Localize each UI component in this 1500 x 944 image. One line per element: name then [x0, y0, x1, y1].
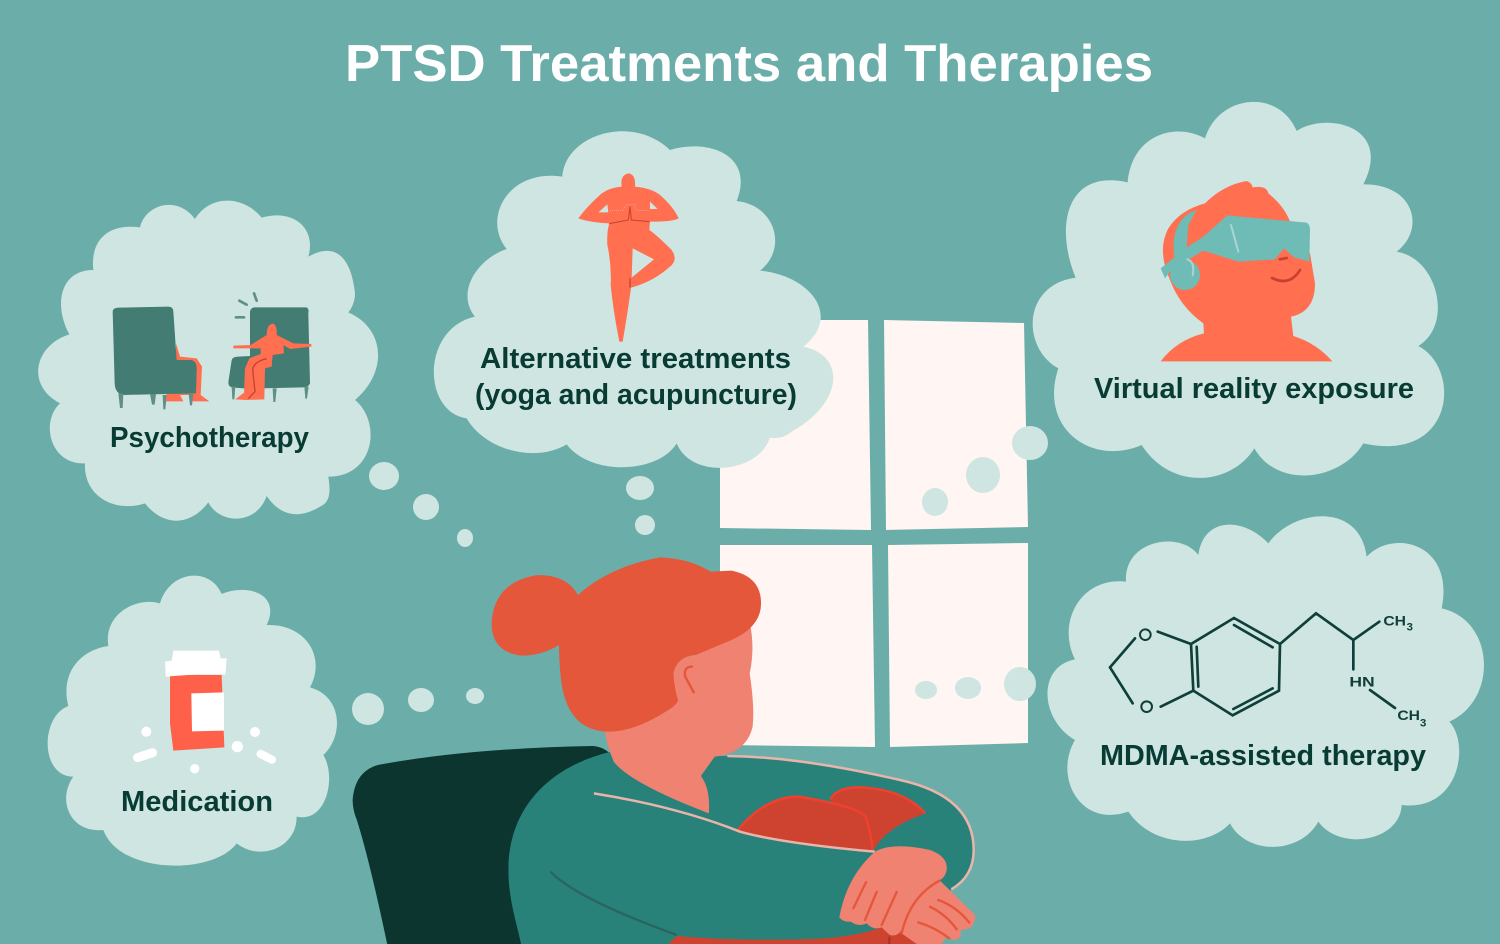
- upper hand: [839, 846, 947, 936]
- trouser fold: [248, 359, 267, 399]
- prayer hands lines: [609, 207, 649, 224]
- illustration: two people in therapy chairs: [113, 293, 311, 409]
- illustration: MDMA molecule: 3: [1420, 718, 1426, 730]
- ear: [673, 655, 711, 700]
- VR goggles: [1161, 210, 1310, 278]
- illustration: MDMA molecule: 3: [1407, 622, 1413, 634]
- sweater outline: [727, 756, 974, 889]
- labels: Psychotherapy: [110, 422, 309, 454]
- trouser seam: [886, 937, 893, 944]
- pills: [132, 727, 277, 773]
- back knee: [831, 787, 925, 848]
- sleeve line: [594, 793, 875, 852]
- illustration: MDMA molecule: HN: [1349, 674, 1375, 690]
- thought cloud: virtual reality: [1033, 102, 1444, 478]
- title: PTSD Treatments and Therapies: [345, 35, 1153, 93]
- goggle highlights: [1187, 225, 1238, 275]
- labels: Medication: [121, 786, 273, 818]
- therapist chair: [113, 307, 197, 395]
- thought cloud: psychotherapy: [38, 201, 378, 521]
- head and shoulders: [1161, 181, 1332, 361]
- patient chair: [228, 307, 310, 389]
- sleeve fold: [551, 872, 677, 935]
- thought bubbles: [352, 426, 1048, 725]
- thought cloud: MDMA: [1047, 516, 1484, 847]
- thought cloud: medication: [48, 576, 337, 866]
- smile and nose: [1272, 258, 1300, 281]
- bottle body: [170, 675, 224, 751]
- labels: (yoga and acupuncture): [475, 379, 797, 411]
- patient chair legs: [232, 387, 309, 402]
- prayer hands dotted outline: [610, 204, 649, 210]
- folded hands: [839, 846, 975, 944]
- front knee: [738, 797, 873, 851]
- window: [720, 320, 1028, 747]
- armchair: [353, 746, 609, 944]
- earpiece: [1170, 260, 1200, 290]
- illustration: pill bottle: [132, 651, 277, 773]
- labels: Virtual reality exposure: [1094, 373, 1414, 405]
- legs of seated therapist: [166, 343, 209, 401]
- front knee outline: [738, 797, 873, 851]
- illustration: yoga figure: [578, 173, 679, 342]
- gesturing patient figure: [233, 324, 311, 400]
- label: [191, 692, 224, 731]
- illustration: MDMA molecule: CH: [1383, 612, 1406, 628]
- labels: MDMA-assisted therapy: [1100, 740, 1426, 772]
- hair: [492, 557, 761, 732]
- trousers: [668, 923, 929, 944]
- labels: [110, 343, 1426, 818]
- person looking out the window: [353, 557, 975, 944]
- back knee outline: [831, 787, 925, 813]
- sweater: [508, 752, 974, 944]
- chair legs: [118, 393, 193, 409]
- illustration: head with VR headset: [1161, 181, 1332, 361]
- cap: [165, 651, 227, 677]
- illustration: MDMA molecule: CH: [1397, 707, 1420, 723]
- finger lines: [853, 881, 969, 938]
- illustration: MDMA molecule: [1110, 612, 1426, 730]
- gesture marks: [236, 293, 257, 317]
- thought cloud: alternative treatments: [434, 131, 833, 468]
- foot shadow: [628, 278, 632, 288]
- labels: Alternative treatments: [480, 343, 791, 375]
- lower hand: [902, 873, 975, 944]
- body, chair and hair: [353, 557, 974, 944]
- ear detail: [685, 667, 694, 692]
- neck and face: [604, 627, 753, 813]
